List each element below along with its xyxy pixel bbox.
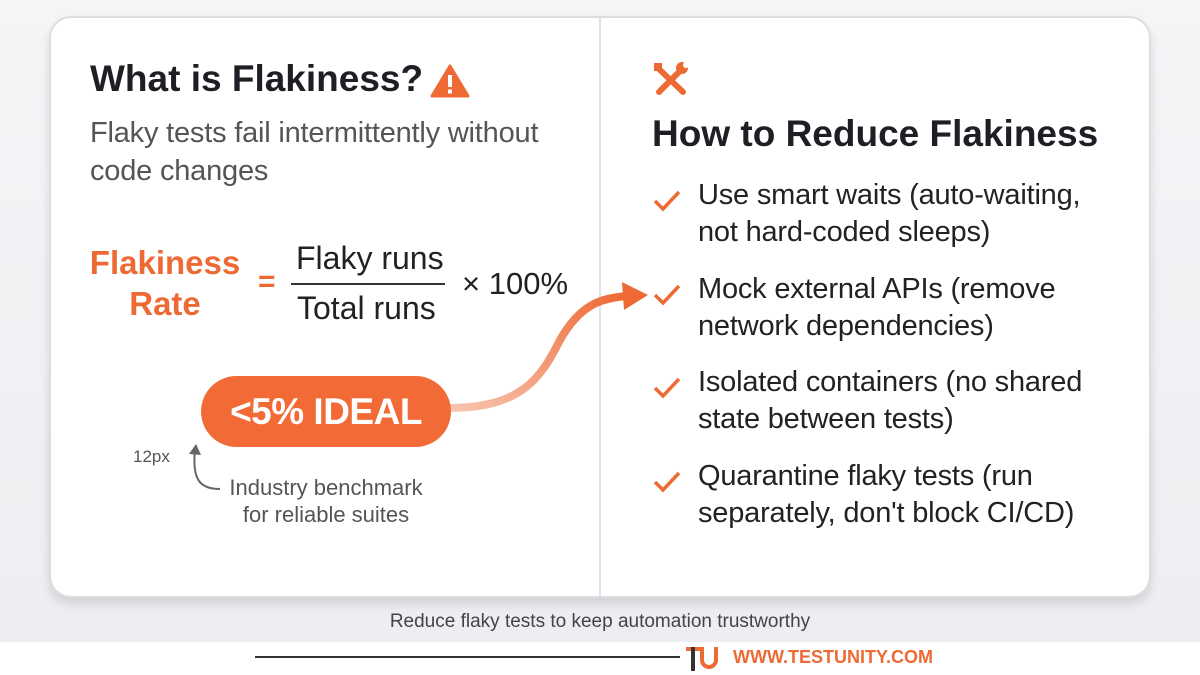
benchmark text: Industry benchmark: [229, 475, 423, 500]
subtitle: [90, 117, 538, 187]
item 3: Isolated containers (no shared: [698, 366, 1082, 398]
item 1: Use smart waits (auto-waiting,: [698, 179, 1080, 211]
annotation 12px: 12px: [133, 447, 170, 466]
arrow: annotation: [189, 444, 220, 490]
formula label: Flakiness: [90, 244, 240, 281]
item 4: separately, don't block CI/CD): [698, 497, 1074, 529]
logo: [686, 647, 718, 671]
subtitle: code changes: [90, 155, 268, 187]
right heading: How to Reduce Flakiness: [652, 113, 1098, 154]
formula label: Rate: [129, 285, 201, 322]
divider: [599, 18, 601, 596]
list: [654, 179, 1082, 529]
formula: Total runs: [297, 290, 436, 326]
icon: warning: [430, 64, 470, 98]
left heading: What is Flakiness?: [90, 58, 423, 99]
card: [49, 16, 1151, 598]
item 2: [654, 273, 1055, 342]
fraction: Flaky runs: [296, 240, 444, 276]
pill: <5% IDEAL: <5% IDEAL: [230, 391, 422, 432]
pill: <5% IDEAL: [201, 376, 451, 447]
icon: tools: [654, 62, 688, 95]
subtitle: Flaky tests fail intermittently without: [90, 117, 538, 149]
item 4: Quarantine flaky tests (run: [698, 460, 1033, 492]
website: WWW.TESTUNITY.COM: [733, 647, 933, 667]
formula: =: [258, 265, 276, 298]
formula: [90, 240, 568, 326]
item 1: [654, 179, 1080, 248]
formula: × 100%: [462, 266, 568, 301]
item 2: network dependencies): [698, 310, 994, 342]
benchmark text: for reliable suites: [243, 502, 409, 527]
benchmark text: [229, 475, 423, 527]
formula label: [90, 244, 240, 322]
item 1: not hard-coded sleeps): [698, 216, 990, 248]
item 4: [654, 460, 1074, 529]
item 2: Mock external APIs (remove: [698, 273, 1055, 305]
arrow: curve to right panel: [450, 282, 648, 412]
item 3: state between tests): [698, 403, 954, 435]
caption: Reduce flaky tests to keep automation trustworthy: [390, 611, 810, 632]
item 3: [654, 366, 1082, 435]
footer line: [255, 656, 680, 658]
